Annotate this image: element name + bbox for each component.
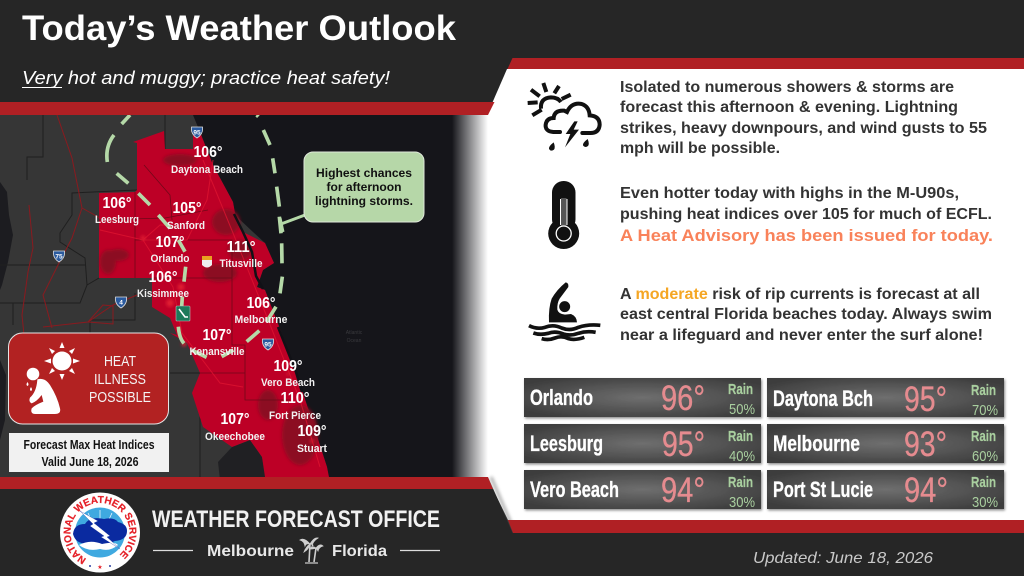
city label: Stuart: Stuart xyxy=(297,443,327,455)
forecast card: Leesburg: Leesburg xyxy=(530,431,603,456)
text: rip current outlook: A moderate risk of rip currents is forecast at all xyxy=(620,286,980,303)
city label: Melbourne: 106° xyxy=(246,295,276,312)
forecast card: Port St Lucie: 30% xyxy=(972,494,998,511)
city label: Melbourne xyxy=(234,295,288,326)
caption: forecast max heat indices: Valid June 18, 2026 xyxy=(42,454,138,469)
text: rip current outlook xyxy=(620,286,992,344)
subtitle: Very hot and muggy; practice heat safety! xyxy=(22,67,390,88)
city label: Stuart xyxy=(297,423,327,455)
slant shadow xyxy=(491,477,515,533)
city label: Okeechobee xyxy=(205,411,265,443)
office location: Melbourne xyxy=(207,543,294,560)
city label: Fort Pierce: 110° xyxy=(280,390,310,407)
forecast card: Leesburg: Rain xyxy=(728,428,753,445)
city label: Fort Pierce: Fort Pierce xyxy=(269,410,321,422)
city label: Stuart: 109° xyxy=(298,423,326,440)
city label: Leesburg: Leesburg xyxy=(95,214,139,226)
forecast card: Orlando xyxy=(524,378,761,418)
callout: lightning storms: Highest chances xyxy=(316,168,412,180)
forecast card: Orlando: Orlando xyxy=(530,385,593,410)
text: storm outlook: forecast this afternoon & evening. Lightning xyxy=(620,99,958,116)
city label: Vero Beach xyxy=(261,358,315,389)
interstate shield: I-4: 4 xyxy=(119,300,123,306)
text: storm outlook: mph will be possible. xyxy=(620,140,780,157)
text: heat outlook: Even hotter today with highs in the M-U90s, xyxy=(620,185,959,202)
forecast card: Port St Lucie: Rain xyxy=(971,474,996,491)
city label: Fort Pierce xyxy=(269,390,321,422)
icon: sun and kneeling person xyxy=(26,342,80,414)
forecast card: Vero Beach xyxy=(524,470,761,511)
forecast card: Orlando: 50% xyxy=(729,401,755,418)
panel: heat illness possible: HEAT xyxy=(104,354,136,370)
city label: Titusville xyxy=(220,239,262,270)
city label: Kenansville: Kenansville xyxy=(190,346,244,358)
text: heat outlook: pushing heat indices over 105 for much of ECFL. xyxy=(620,206,992,223)
icon: sun, storm cloud and lightning xyxy=(528,83,600,151)
city label: Orlando: Orlando xyxy=(150,253,190,265)
text: storm outlook xyxy=(620,79,987,157)
forecast card: Daytona Bch: 70% xyxy=(972,402,998,419)
callout: lightning storms: for afternoon xyxy=(326,182,402,194)
interstate shield: I-75 xyxy=(53,251,65,262)
caption: forecast max heat indices: Forecast Max Heat Indices xyxy=(24,437,154,452)
interstate shield: I-95 north: 95 xyxy=(193,130,201,136)
forecast card: Melbourne xyxy=(767,424,1004,465)
dashed line: lightning storm zone xyxy=(107,115,282,357)
city label: Kenansville: 107° xyxy=(202,327,232,344)
forecast card: Leesburg: 40% xyxy=(729,448,755,465)
panel: heat illness possible: POSSIBLE xyxy=(89,390,151,406)
logo: national weather service: NATIONAL WEATHER SERVICE xyxy=(63,496,136,564)
fade from map to white panel xyxy=(452,115,488,477)
text: heat outlook xyxy=(620,185,993,245)
ocean label: Atlantic xyxy=(346,330,362,336)
icon: swimmer xyxy=(529,282,600,340)
forecast card: Port St Lucie: Port St Lucie xyxy=(773,477,873,502)
city label: Kissimmee: Kissimmee xyxy=(137,288,189,300)
lagoon xyxy=(234,214,302,392)
caption: forecast max heat indices xyxy=(9,433,169,472)
forecast card: Daytona Bch: Rain xyxy=(971,382,996,399)
office location: Florida xyxy=(332,543,387,560)
forecast card: Orlando: Rain xyxy=(728,381,753,398)
callout: lightning storms xyxy=(280,152,424,232)
forecast card: Daytona Bch: Daytona Bch xyxy=(773,386,873,411)
city label: Leesburg: 106° xyxy=(102,195,132,212)
city label: Orlando: 107° xyxy=(156,234,184,251)
forecast card: Vero Beach: Rain xyxy=(728,474,753,491)
beachline shield xyxy=(202,256,212,268)
city label: Okeechobee: Okeechobee xyxy=(205,431,265,443)
turnpike sign xyxy=(176,306,190,321)
ocean label: Ocean xyxy=(347,338,362,344)
forecast card: Leesburg: 95° xyxy=(662,425,705,464)
city label: Sanford xyxy=(167,200,205,232)
text: rip current outlook: east central Florida beaches today. Always swim xyxy=(620,306,992,323)
interstate shield: I-95 south: 95 xyxy=(264,342,272,348)
city label: Orlando xyxy=(150,234,190,265)
updated date: Updated: June 18, 2026 xyxy=(753,550,933,567)
city label: Okeechobee: 107° xyxy=(220,411,250,428)
forecast card: Melbourne: Rain xyxy=(971,428,996,445)
callout: lightning storms: lightning storms. xyxy=(315,196,413,208)
city label: Daytona Beach: 106° xyxy=(194,144,222,161)
city label: Daytona Beach: Daytona Beach xyxy=(171,164,243,176)
city label: Leesburg xyxy=(95,195,139,226)
forecast card: Vero Beach: Vero Beach xyxy=(530,477,619,502)
panel: white text panel xyxy=(487,69,1024,520)
map panel xyxy=(0,115,456,480)
city label: Kissimmee: 106° xyxy=(148,269,178,286)
forecast card: Melbourne: 93° xyxy=(904,425,947,464)
forecast card: Leesburg xyxy=(524,424,761,465)
city label: Titusville: 111° xyxy=(226,239,256,256)
city label: Kenansville xyxy=(190,327,244,358)
forecast card: Port St Lucie: 94° xyxy=(904,471,948,510)
forecast card: Daytona Bch xyxy=(767,378,1004,419)
bottom band left xyxy=(0,477,1024,576)
office name: WEATHER FORECAST OFFICE xyxy=(152,506,440,533)
icon: thermometer xyxy=(548,181,579,249)
city label: Vero Beach: Vero Beach xyxy=(261,377,315,389)
panel: heat illness possible xyxy=(8,333,168,424)
header band xyxy=(0,58,1024,115)
red heat advisory area xyxy=(99,131,329,477)
text: heat outlook: A Heat Advisory has been issued for today. xyxy=(620,226,993,245)
forecast card: Melbourne: 60% xyxy=(972,448,998,465)
interstate shield: I-95 south xyxy=(262,339,274,350)
text: storm outlook: strikes, heavy downpours, and wind gusts to 55 xyxy=(620,120,987,137)
bottom band right xyxy=(508,520,1024,533)
city label: Sanford: Sanford xyxy=(167,220,205,232)
interstate shield: I-75: 75 xyxy=(55,254,63,260)
forecast card: Melbourne: Melbourne xyxy=(773,431,860,456)
city label: Daytona Beach xyxy=(171,144,243,176)
city label: Kissimmee xyxy=(137,269,189,300)
forecast card: Vero Beach: 94° xyxy=(661,471,705,510)
panel: heat illness possible: ILLNESS xyxy=(94,372,146,388)
office location xyxy=(153,543,440,560)
forecast card: Port St Lucie xyxy=(767,470,1004,511)
city label: Vero Beach: 109° xyxy=(274,358,302,375)
title: Today’s Weather Outlook xyxy=(22,9,457,48)
logo: national weather service: ★ xyxy=(97,564,103,571)
text: storm outlook: Isolated to numerous showers & storms are xyxy=(620,79,954,96)
icon: palm trees xyxy=(300,538,323,563)
city label: Sanford: 105° xyxy=(172,200,202,217)
city label: Melbourne: Melbourne xyxy=(234,314,288,326)
text: rip current outlook: near a lifeguard and never enter the surf alone! xyxy=(620,327,983,344)
forecast card: Vero Beach: 30% xyxy=(729,494,755,511)
interstate shield: I-4 xyxy=(115,297,127,308)
forecast card: Daytona Bch: 95° xyxy=(904,380,947,419)
forecast card: Orlando: 96° xyxy=(661,379,705,418)
city label: Titusville: Titusville xyxy=(220,258,262,270)
interstate shield: I-95 north xyxy=(191,127,203,138)
